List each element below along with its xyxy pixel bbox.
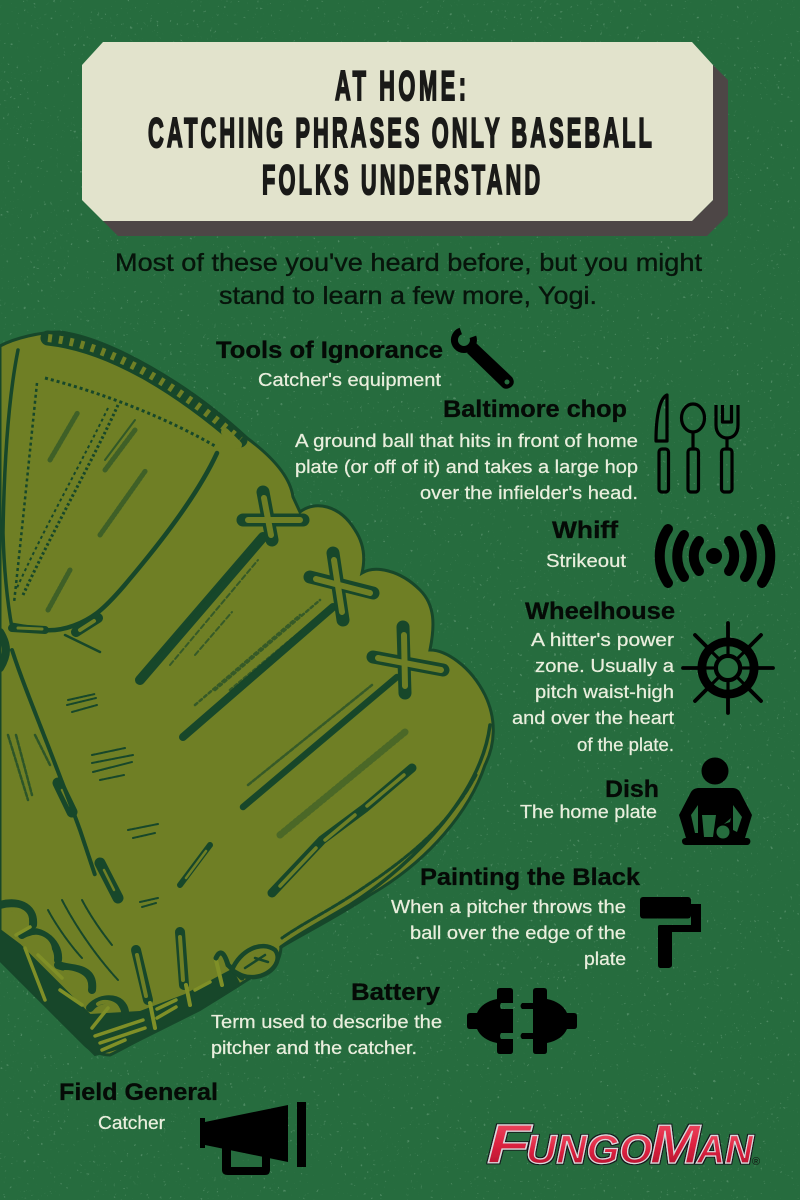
glove body: [0, 332, 493, 1055]
term: Wheelhouse: and over the heart: [512, 707, 674, 728]
term: Whiff: Whiff: [552, 517, 619, 544]
icon: person at table: [679, 758, 752, 845]
intro text: Most of these you've heard before, but you might: [115, 249, 702, 277]
icon: cutlery: [656, 395, 738, 492]
term: Field General: Field General: [59, 1079, 218, 1106]
term: Painting the Black: Painting the Black: [420, 864, 641, 891]
glove finger lacing: [243, 492, 443, 693]
term: Wheelhouse: A hitter's power: [531, 629, 674, 650]
intro text: stand to learn a few more, Yogi.: [219, 282, 597, 310]
title text: FOLKS UNDERSTAND: [262, 158, 540, 204]
icon: wrench: [454, 331, 514, 389]
icon: paint roller: [640, 897, 701, 968]
title banner: [82, 42, 728, 236]
term: Field General: Catcher: [98, 1112, 165, 1133]
icon: signal waves: [660, 529, 770, 583]
term: Tools of Ignorance: [216, 337, 443, 390]
term: Tools of Ignorance: Catcher's equipment: [258, 369, 441, 390]
term: Battery: [211, 979, 442, 1058]
term: Wheelhouse: [512, 598, 675, 755]
term: Baltimore chop: A ground ball that hits in front of home: [295, 430, 638, 451]
term: Painting the Black: plate: [584, 948, 626, 969]
glove seams and finger slits: [8, 412, 405, 980]
banner shadow: [103, 65, 728, 236]
term: Whiff: [546, 517, 626, 571]
logo: FungoMan: ®: [752, 1156, 760, 1168]
icon: ship wheel: [683, 623, 773, 713]
term: Field General: [59, 1079, 218, 1133]
title text: AT HOME:: [335, 64, 466, 110]
term: Dish: The home plate: [520, 801, 657, 822]
glove illustration: [0, 332, 493, 1055]
term: Painting the Black: When a pitcher throws the: [391, 896, 626, 917]
term: Whiff: Strikeout: [546, 550, 626, 571]
term: Battery: pitcher and the catcher.: [211, 1037, 417, 1058]
term: Wheelhouse: Wheelhouse: [525, 598, 675, 625]
glove cuff lacing: [3, 338, 240, 628]
glove heel lacing: [0, 618, 278, 1055]
term: Tools of Ignorance: Tools of Ignorance: [216, 337, 443, 364]
icon: megaphone: [200, 1102, 306, 1175]
term: Wheelhouse: pitch waist-high: [535, 681, 674, 702]
term: Dish: Dish: [605, 776, 659, 803]
term: Battery: Term used to describe the: [211, 1011, 442, 1032]
term: Baltimore chop: [295, 396, 638, 503]
banner plate: [82, 42, 713, 221]
term: Battery: Battery: [351, 979, 441, 1006]
logo: FungoMan: AN: [696, 1128, 754, 1172]
glove palm stitching: [272, 725, 490, 947]
term: Painting the Black: [391, 864, 641, 969]
intro text: [115, 249, 702, 310]
logo: FungoMan: M: [650, 1113, 701, 1175]
term: Baltimore chop: plate (or off of it) and takes a large hop: [295, 456, 638, 477]
term: Dish: [520, 776, 659, 822]
logo: FungoMan: UNGO: [526, 1128, 652, 1172]
term: Baltimore chop: Baltimore chop: [443, 396, 627, 423]
icon: plug: [467, 988, 577, 1054]
term: Wheelhouse: zone. Usually a: [535, 655, 675, 676]
term: Baltimore chop: over the infielder's head.: [420, 482, 638, 503]
title text: CATCHING PHRASES ONLY BASEBALL: [148, 111, 652, 157]
term: Painting the Black: ball over the edge of the: [410, 922, 626, 943]
title text: [148, 64, 652, 204]
logo: FungoMan: F: [487, 1113, 533, 1175]
logo: FungoMan: [487, 1113, 760, 1175]
term: Wheelhouse: of the plate.: [577, 734, 674, 755]
